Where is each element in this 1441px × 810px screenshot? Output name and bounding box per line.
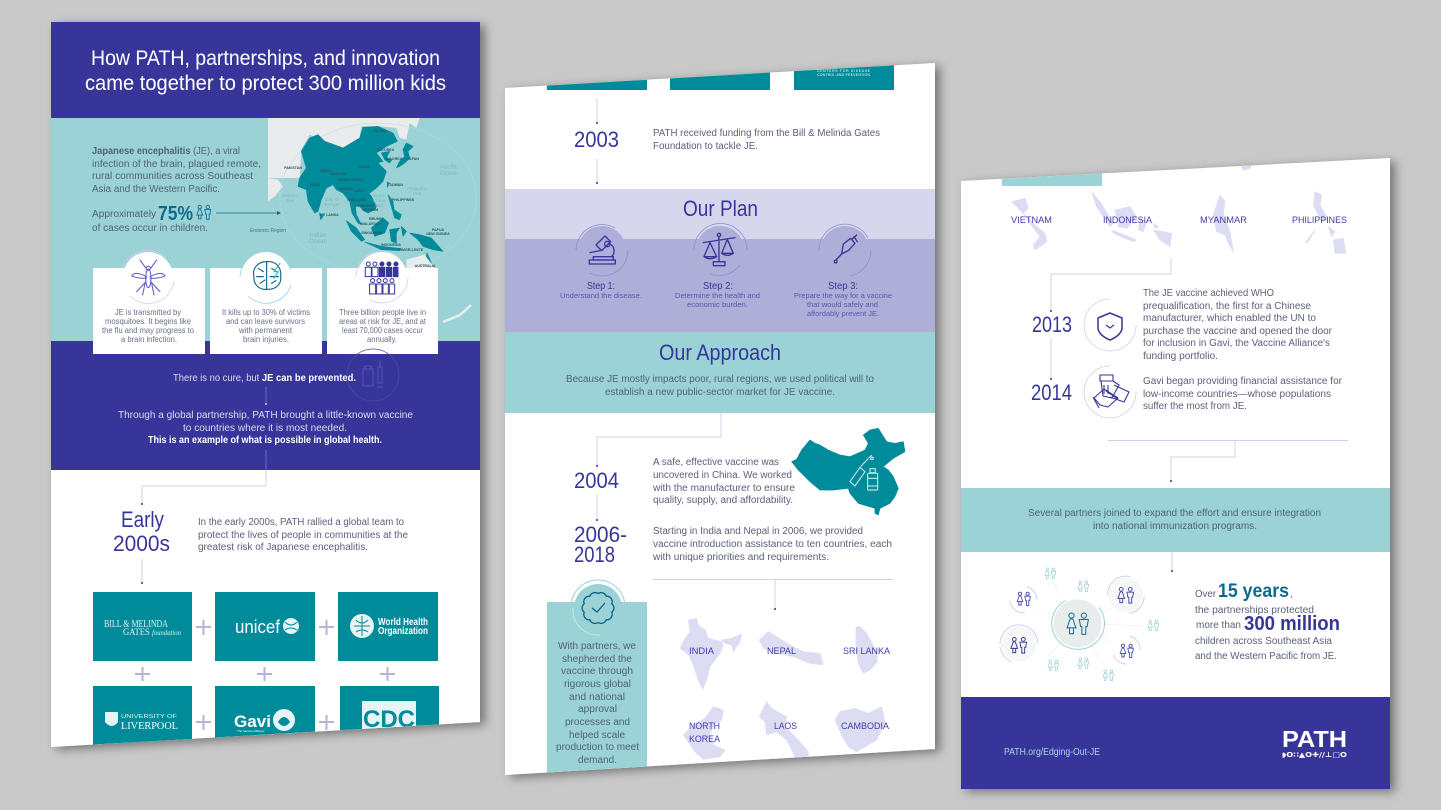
statistic: 15 years, 300 million: more than <box>1196 620 1241 631</box>
timeline: 2013: funding portfolio. <box>1143 351 1218 362</box>
card: mosquito <box>93 250 205 354</box>
card: brain <box>210 251 322 354</box>
map labels: RUSSIA <box>373 129 387 133</box>
card: people at risk: least 70,000 cases occur <box>342 326 423 335</box>
map labels: NEPAL <box>320 169 333 173</box>
logo: Gavi: Gavi <box>234 712 271 731</box>
timeline: 2006-2018: 2006- <box>574 522 627 547</box>
card: people at risk: annually. <box>367 335 397 344</box>
country shapes: first set <box>680 618 885 760</box>
timeline: 2004: 2004 <box>574 468 619 493</box>
intro text: Japanese encephalitis (JE), a viral <box>92 146 240 157</box>
map labels: N.KOREA <box>378 148 395 152</box>
callout: with partners: processes and <box>565 717 630 728</box>
step 3: Step 3: <box>828 281 858 292</box>
logo: CDC <box>340 686 439 730</box>
country labels: second set <box>1011 215 1347 226</box>
icon: vial and syringe <box>347 349 399 401</box>
prevention text: to countries where it is most needed. <box>183 423 347 434</box>
timeline: 2006-2018 <box>574 522 892 567</box>
map labels: BURMA <box>339 187 353 191</box>
timeline: 2004 <box>574 457 795 521</box>
callout: with partners: approval <box>578 704 617 715</box>
prevention text: There is no cure, but JE can be prevented. <box>173 373 356 384</box>
teal intro band <box>51 118 481 341</box>
map labels: INDONESIA <box>381 243 401 247</box>
step 2: economic burden. <box>687 300 748 309</box>
step 3: Prepare the way for a vaccine <box>794 291 892 300</box>
country labels: first set: KOREA <box>689 734 721 745</box>
statistic: 15 years, 300 million: the partnerships protected <box>1195 605 1314 616</box>
logo: UNICEF <box>215 592 315 661</box>
logo boxes continued: CENTERS FOR DISEASE <box>817 69 871 73</box>
card: brain: brain injuries. <box>243 335 289 344</box>
map labels: BHUTAN <box>331 172 346 176</box>
callout: with partners <box>547 580 647 782</box>
map labels: AUSTRALIA <box>415 264 436 268</box>
statistic: 15 years, 300 million: children across Southeast Asia <box>1195 636 1332 647</box>
country labels: first set: SRI LANKA <box>843 646 891 657</box>
card: mosquito: a brain infection. <box>121 335 177 344</box>
connector <box>1108 440 1348 482</box>
our approach band: Because JE mostly impacts poor, rural regions, we used political will to <box>566 374 874 385</box>
timeline: 2014: Gavi began providing financial assistance for <box>1143 376 1343 387</box>
callout: with partners: and national <box>569 692 625 703</box>
our approach band: establish a new public-sector market for JE vaccine. <box>605 387 835 398</box>
map labels: Endemic Region <box>250 228 286 234</box>
map labels: South <box>373 193 386 199</box>
map labels: MALAYSIA <box>361 222 380 226</box>
callout: with partners: shepherded the <box>562 654 632 665</box>
map labels: Sea <box>375 203 384 209</box>
statistic: 15 years, 300 million: and the Western Pacific from JE. <box>1195 651 1337 662</box>
callout: with partners: With partners, we <box>558 641 636 652</box>
logo: World Health Organization: Organization <box>378 626 428 637</box>
connector <box>653 580 893 610</box>
statistic: 75 percent of cases in children <box>92 204 212 231</box>
panel: page 2 <box>505 60 936 782</box>
intro text: infection of the brain, plagued remote, <box>92 159 261 170</box>
icon: scales <box>703 233 735 266</box>
timeline: 2013 <box>1032 288 1333 362</box>
map labels: CAMBODIA <box>355 204 375 208</box>
map labels: TAIWAN <box>389 183 403 187</box>
timeline: 2006-2018: vaccine introduction assistance to ten countries, each <box>653 539 892 550</box>
panel: page 3 <box>961 158 1391 790</box>
our plan band: Our Plan <box>683 196 758 221</box>
step 2: Step 2: <box>703 281 733 292</box>
map labels <box>250 129 458 268</box>
map labels: Sea <box>413 191 422 197</box>
country labels: second set: MYANMAR <box>1200 215 1247 226</box>
statistic: 15 years, 300 million: 15 years <box>1218 581 1289 602</box>
logo: Gavi: The Vaccine Alliance <box>237 729 265 733</box>
timeline: 2006-2018: Starting in India and Nepal in 2006, we provided <box>653 526 863 537</box>
statistic: 75 percent of cases in children: Approximately <box>92 209 156 220</box>
prevention text: Through a global partnership, PATH brought a little-known vaccine <box>118 410 413 421</box>
map labels: Indian <box>310 233 326 239</box>
callout: with partners: helped scale <box>569 730 625 741</box>
logo: Bill and Melinda Gates Foundation <box>93 592 192 661</box>
logo: World Health Organization: World Health <box>378 617 428 628</box>
map labels: NEW GUINEA <box>426 232 450 236</box>
icon: mosquito <box>132 260 165 295</box>
map labels: BRUNEI <box>369 217 383 221</box>
statistic: 15 years, 300 million: Over <box>1195 589 1217 600</box>
callout: with partners: rigorous global <box>564 679 631 690</box>
footer band: PATH.org/Edging-Out-JE <box>1004 747 1100 758</box>
card: mosquito: mosquitoes. It begins like <box>105 317 192 326</box>
card: mosquito: the flu and may progress to <box>102 326 195 335</box>
icon: vial and syringe <box>850 455 878 490</box>
heading: early 2000s: 2000s <box>113 531 170 556</box>
callout: with partners: vaccine through <box>561 666 633 677</box>
card: brain: and can leave survivors <box>226 317 305 326</box>
map labels: Arabian <box>282 193 299 199</box>
map of China <box>792 428 905 515</box>
timeline: 2014: suffer the most from JE. <box>1143 401 1247 412</box>
map labels: JAPAN <box>407 157 419 161</box>
connector <box>141 450 266 505</box>
our plan band <box>505 189 936 332</box>
map labels: China <box>373 198 386 204</box>
timeline: 2003: Foundation to tackle JE. <box>653 141 758 152</box>
card: people at risk <box>327 251 438 354</box>
partners band: Several partners joined to expand the effort and ensure integration <box>1028 508 1321 519</box>
map labels: Bengal <box>325 202 339 208</box>
partners band <box>961 488 1391 552</box>
logo: University of Liverpool <box>93 686 192 745</box>
early 2000s text: greatest risk of Japanese encephalitis. <box>198 542 368 553</box>
icon: microscope <box>589 236 615 264</box>
statistic: 75 percent of cases in children: of cases occur in children. <box>92 223 208 234</box>
early 2000s text <box>198 517 408 553</box>
timeline: 2014: 2014 <box>1031 380 1072 405</box>
new zealand <box>443 305 471 322</box>
statistic: 15 years, 300 million: , <box>1290 589 1293 600</box>
step 3: affordably prevent JE. <box>807 309 879 318</box>
callout: with partners: demand. <box>578 755 617 766</box>
country labels: first set: NORTH <box>689 721 720 732</box>
map labels: BANGLADESH <box>338 178 364 182</box>
plus signs <box>135 620 395 730</box>
intro text: Asia and the Western Pacific. <box>92 184 220 195</box>
card: people at risk: Three billion people live in <box>339 308 426 317</box>
early 2000s text: protect the lives of people in communities at the <box>198 530 408 541</box>
country labels: first set <box>689 646 891 745</box>
map labels: PHILIPPINES <box>392 198 415 202</box>
country labels: second set: INDONESIA <box>1103 215 1153 226</box>
connector <box>1050 258 1171 312</box>
logo: UNICEF: unicef <box>235 617 281 637</box>
map labels: S.KOREA <box>386 157 403 161</box>
logo: PATH: PATH <box>1282 726 1347 752</box>
map labels: PAKISTAN <box>284 166 302 170</box>
timeline: 2006-2018: with unique priorities and requirements. <box>652 552 829 563</box>
logo: University of Liverpool: UNIVERSITY OF <box>121 714 177 720</box>
logo: Gavi <box>215 686 315 738</box>
map labels: Bay of <box>325 197 339 203</box>
header band: How PATH, partnerships, and innovation <box>91 47 440 70</box>
timeline: 2013: purchase the vaccine and opened the door <box>1143 326 1333 337</box>
map labels: Ocean <box>309 239 327 245</box>
icon: people <box>365 262 398 294</box>
step 1 <box>560 225 642 300</box>
diagram: protected children network <box>1000 568 1159 681</box>
icon: shield <box>1098 313 1122 340</box>
footer band <box>961 697 1391 790</box>
logo boxes continued: CONTROL AND PREVENTION <box>817 73 870 77</box>
callout: with partners: production to meet <box>556 742 639 753</box>
map labels: Ocean <box>440 171 458 177</box>
icon: brain <box>254 262 281 290</box>
map labels: PAPUA <box>432 228 445 232</box>
prevention text <box>118 373 413 446</box>
map labels: TIMOR-LESTE <box>399 248 424 252</box>
card: mosquito: JE is transmitted by <box>115 308 181 317</box>
logo: PATH: ◗O∷▲O✚//⊥□O <box>1282 751 1347 759</box>
timeline: 2014 <box>1031 366 1343 418</box>
timeline: 2013: for inclusion in Gavi, the Vaccine Alliance's <box>1143 338 1330 349</box>
statistic: 15 years, 300 million <box>1195 581 1340 662</box>
country labels: first set: INDIA <box>689 646 715 657</box>
icon: check badge <box>582 593 614 623</box>
timeline: 2003 <box>574 99 880 184</box>
logo boxes continued <box>547 65 894 90</box>
logo: Bill and Melinda Gates Foundation: GATES foundation <box>123 627 181 637</box>
early 2000s text: In the early 2000s, PATH rallied a global team to <box>198 517 404 528</box>
map labels: Sea <box>286 198 295 204</box>
our approach band: Our Approach <box>659 340 781 365</box>
map labels: Philippine <box>407 186 428 192</box>
timeline: 2004: with the manufacturer to ensure <box>652 483 795 494</box>
step 3: that would safely and <box>807 300 878 309</box>
connector <box>596 413 721 467</box>
map labels: Pacific <box>440 165 458 171</box>
header band <box>51 21 481 118</box>
country labels: first set: NEPAL <box>767 646 796 657</box>
logo: CDC: CDC <box>363 706 415 733</box>
logo: World Health Organization <box>338 592 438 661</box>
step 2 <box>675 224 760 309</box>
map labels: SRI LANKA <box>319 213 339 217</box>
our approach band <box>505 332 936 413</box>
heading: early 2000s: Early <box>121 507 164 532</box>
icon: joined hands <box>1093 375 1129 408</box>
timeline: 2004: A safe, effective vaccine was <box>653 457 779 468</box>
map labels: INDIA <box>310 183 320 187</box>
icon: syringe <box>834 235 857 263</box>
map labels: VIETNAM <box>362 208 378 212</box>
intro text <box>92 146 261 195</box>
timeline: 2013: 2013 <box>1032 312 1072 337</box>
country labels: first set: LAOS <box>774 721 797 732</box>
prevention text: This is an example of what is possible in global health. <box>148 435 382 446</box>
timeline: 2006-2018: 2018 <box>574 542 615 567</box>
country labels: second set: VIETNAM <box>1011 215 1052 226</box>
card: brain: with permanent <box>238 326 293 335</box>
timeline: 2013: The JE vaccine achieved WHO <box>1143 288 1274 299</box>
heading: early 2000s <box>114 511 170 551</box>
arrow to map <box>216 211 281 215</box>
card: brain: It kills up to 30% of victims <box>222 308 310 317</box>
map of endemic region <box>268 118 476 273</box>
timeline: 2004: quality, supply, and affordability. <box>653 495 793 506</box>
timeline: 2014: low-income countries—whose populations <box>1143 389 1331 400</box>
statistic: 15 years, 300 million: 300 million <box>1244 613 1340 635</box>
timeline: 2013: prequalification, the first for a Chinese <box>1143 301 1311 312</box>
partners band: into national immunization programs. <box>1093 521 1257 532</box>
step 1: Understand the disease. <box>560 291 642 300</box>
timeline: 2003: PATH received funding from the Bill & Melinda Gates <box>653 128 880 139</box>
intro text: rural communities across Southeast <box>92 171 253 182</box>
map labels: THAILAND <box>347 198 366 202</box>
statistic: 75 percent of cases in children: 75% <box>158 203 193 225</box>
map labels: CHINA <box>358 165 370 169</box>
country labels: second set: PHILIPPINES <box>1292 215 1347 226</box>
step 2: Determine the health and <box>675 291 760 300</box>
blue prevention band <box>51 341 481 470</box>
country labels: first set: CAMBODIA <box>841 721 890 732</box>
timeline: 2013: manufacturer, which enabled the UN to <box>1143 313 1316 324</box>
logo: Bill and Melinda Gates Foundation: BILL & MELINDA <box>104 619 169 630</box>
country shapes: second set <box>1012 163 1346 253</box>
panel: page 1 <box>51 21 481 756</box>
timeline: 2004: uncovered in China. We worked <box>653 470 792 481</box>
logo: University of Liverpool: LIVERPOOL <box>121 720 178 732</box>
header band: came together to protect 300 million kids <box>85 72 446 95</box>
card: people at risk: areas at risk for JE, and at <box>339 317 427 326</box>
step 1: Step 1: <box>587 281 615 292</box>
step 3 <box>794 224 892 318</box>
timeline: 2003: 2003 <box>574 127 619 152</box>
map labels: LAOS <box>354 189 365 193</box>
map labels: SINGAPORE <box>361 231 383 235</box>
